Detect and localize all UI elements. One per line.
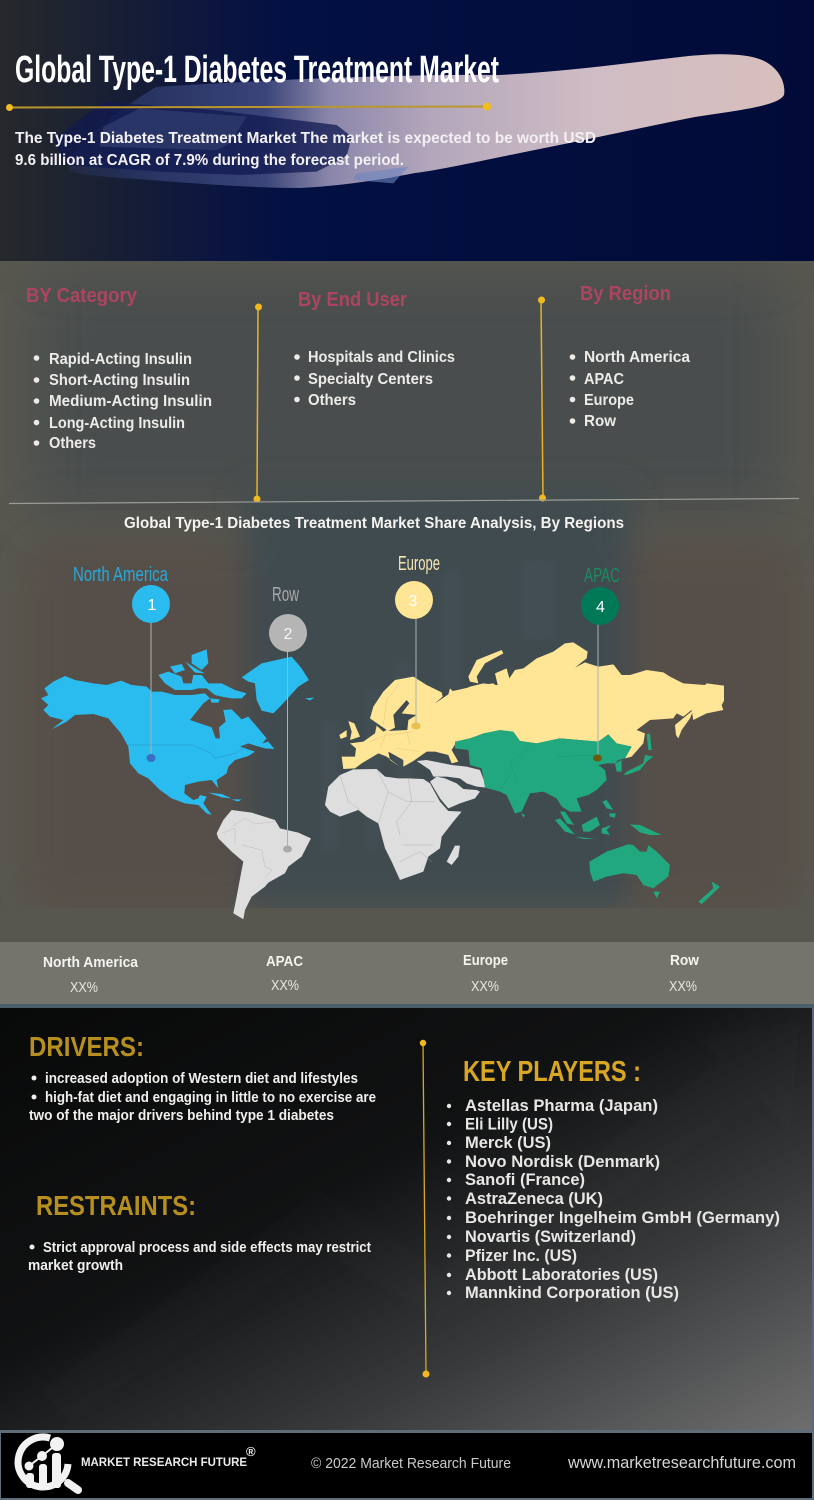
list: key players: Pfizer Inc. (US) [465,1247,577,1265]
registered mark: ® [246,1444,256,1459]
title underline [6,102,491,111]
marker 2: row: Row [272,584,299,606]
marker 1: north america: 1 [148,597,157,614]
marker 1: north america [73,564,170,762]
divider: end user and region [538,296,546,502]
icon: market research future logo [18,1437,78,1490]
intro text: The Type-1 Diabetes Treatment Market The market is expected to be worth USD [15,130,596,147]
list: regions: APAC [584,371,624,388]
heading: restraints: RESTRAINTS: [36,1190,196,1221]
list: key players [447,1097,780,1302]
world map [41,642,724,919]
footer bar [0,1430,814,1500]
icon: insulin device [53,102,408,183]
list: key players: Mannkind Corporation (US) [465,1284,679,1302]
table values: XX% [669,978,697,995]
list: end users: Specialty Centers [308,371,433,388]
list: categories: Rapid-Acting Insulin [49,351,192,368]
list: key players: Merck (US) [465,1134,551,1152]
marker 2: row: 2 [284,626,293,643]
list: key players: Boehringer Ingelheim GmbH (Germany) [465,1209,780,1227]
list: key players: Astellas Pharma (Japan) [465,1097,658,1115]
website: www.marketresearchfuture.com [567,1454,796,1472]
heading: key players: KEY PLAYERS : [463,1056,641,1088]
list: key players: Eli Lilly (US) [465,1116,553,1134]
list: key players: Novartis (Switzerland) [465,1228,636,1246]
list: key players: Sanofi (France) [465,1171,585,1189]
marker 3: europe: 3 [409,593,418,610]
table values [70,977,697,996]
heading: by end user: By End User [298,289,407,311]
map heading: Global Type-1 Diabetes Treatment Market Share Analysis, By Regions [124,515,624,532]
list: regions: Europe [584,392,634,409]
list: regions [570,349,690,430]
table labels: APAC [266,953,303,970]
table values: XX% [471,978,499,995]
list: key players: Novo Nordisk (Denmark) [465,1153,660,1171]
list: end users: Hospitals and Clinics [308,349,455,366]
table labels [43,952,699,971]
title: Global Type-1 Diabetes Treatment Market [15,49,499,91]
marker 4: apac: 4 [596,599,605,616]
divider: drivers and players [420,1040,430,1378]
list: regions: Row [584,413,617,430]
text: drivers [29,1070,376,1124]
table values: XX% [271,977,299,994]
map: north america [41,649,314,815]
text: restraints: market growth [28,1257,123,1274]
marker 3: europe: Europe [398,553,440,575]
list: key players: Abbott Laboratories (US) [465,1266,658,1284]
list: categories: Long-Acting Insulin [49,415,185,432]
list: key players: AstraZeneca (UK) [465,1190,603,1208]
list: end users: Others [308,392,356,409]
copyright: © 2022 Market Research Future [311,1455,511,1472]
list: categories [34,351,212,452]
heading: drivers: DRIVERS: [29,1031,144,1062]
panel: by region [570,283,690,430]
text: drivers: increased adoption of Western diet and lifestyles [45,1070,358,1087]
table labels: Row [670,952,699,969]
map: row africa and middle east [325,760,487,880]
marker 4: apac [581,565,620,762]
background rising arrow [40,1020,800,1420]
map: apac [455,730,720,904]
text: restraints: Strict approval process and side effects may restrict [43,1239,371,1256]
table labels: North America [43,954,139,971]
divider: category and end user [254,304,262,502]
panel: by category [26,285,212,452]
map: row south america [217,810,311,919]
marker 2: row [269,584,307,852]
panel: regional share table [0,942,814,1008]
intro text: 9.6 billion at CAGR of 7.9% during the forecast period. [15,152,404,169]
marker 3: europe [395,553,440,730]
marker 4: apac: APAC [584,565,620,587]
icon: pointing finger [68,54,784,188]
map: russia [450,642,724,758]
list: categories: Short-Acting Insulin [49,372,190,389]
heading: by category: BY Category [26,285,138,307]
table values: XX% [70,979,98,996]
text: restraints [28,1239,371,1274]
list: regions: North America [584,349,690,366]
list: categories: Medium-Acting Insulin [49,393,212,410]
panel: drivers restraints key players [0,1008,814,1433]
text: drivers: two of the major drivers behind type 1 diabetes [29,1107,334,1124]
panel: by end user [294,289,455,409]
intro text [15,130,596,169]
list: categories: Others [49,435,96,452]
panel: header banner [0,0,814,261]
panel: segments and map background [0,261,814,942]
brand name: MARKET RESEARCH FUTURE [81,1455,247,1469]
table labels: Europe [463,952,508,969]
list: end users [294,349,455,409]
text: drivers: high-fat diet and engaging in little to no exercise are [45,1089,376,1106]
heading: by region: By Region [580,283,671,305]
map: europe [339,677,520,769]
marker 1: north america: North America [73,564,169,586]
